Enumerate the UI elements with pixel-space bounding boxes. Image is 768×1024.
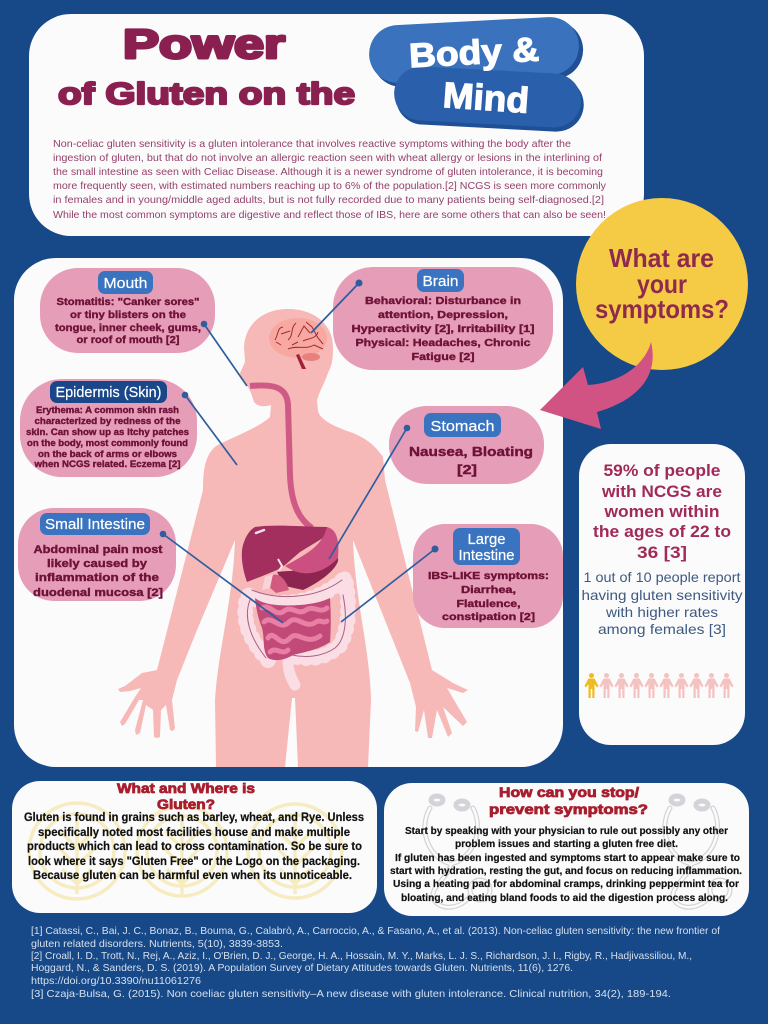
callout line: skin	[182, 392, 237, 465]
text: stomach symptoms	[409, 444, 533, 477]
text: skin symptoms	[26, 405, 189, 469]
text: skin symptoms: skin. Can show up as itchy patches	[26, 427, 189, 437]
bubble: small intestine	[18, 508, 176, 601]
callout line: brain	[311, 280, 362, 333]
intro paragraph	[53, 138, 607, 221]
illustration: liver	[242, 526, 328, 582]
text: gluten description: products which can lead to cross contamination. So be sure to	[27, 841, 362, 853]
text: prevention advice: If gluten has been ingested and symptoms start to appear make sure to	[395, 852, 740, 864]
heading: How can you stop/prevent symptoms?	[489, 784, 648, 817]
stat: 59% of people	[593, 461, 731, 562]
title badge: Body & Mind: Body &	[408, 31, 540, 75]
text: brain symptoms: Fatigue [2]	[412, 351, 474, 363]
panel: header	[29, 14, 644, 236]
text: prevention advice	[390, 825, 742, 904]
label: Small Intestine	[40, 513, 150, 535]
text: skin symptoms: on the body, most commonly found	[27, 438, 188, 448]
illustration: esophagus	[250, 385, 312, 528]
icon: wheat watermarks	[29, 803, 342, 899]
bubble: mouth	[40, 268, 215, 353]
title badge: Body & Mind	[368, 15, 585, 133]
callout line: mouth	[201, 321, 247, 386]
arrow: from circle to symptoms	[540, 342, 653, 429]
stat: 1 out of 10: with higher rates	[605, 604, 718, 620]
heading: What and Where is Gluten?	[117, 780, 255, 812]
text: skin symptoms: Erythema: A common skin rash	[36, 405, 179, 415]
callout circle: What are your symptoms?: What are	[609, 243, 714, 273]
stat: 1 out of 10: having gluten sensitivity	[582, 587, 742, 603]
text: prevention advice: bloating, and eating bland foods to aid the digestion process along.	[401, 892, 728, 904]
text: gluten description: Because gluten can be harmful even when its unnoticeable.	[33, 870, 352, 882]
callout line: small intestine	[160, 531, 283, 623]
references: [1] Catassi, C., Bai, J. C., Bonaz, B., Bouma, G., Calabrò, A., Carroccio, A., & Fasano, A., et al. (2013). Non-celiac gluten sensitivity: the new frontier of	[31, 925, 720, 937]
text: gluten description: look where it says "Gluten Free" or the Logo on the packaging.	[28, 856, 360, 868]
heading: What and Where is Gluten?: What and Where is	[117, 780, 255, 796]
stat: 59% of people: 59% of people	[604, 461, 720, 480]
pictogram: 1 of 10 people	[584, 673, 734, 698]
references: gluten related disorders. Nutrients, 5(10), 3839-3853.	[31, 938, 283, 950]
title: Power of Gluten on the: of Gluten on the	[58, 76, 355, 111]
references: https://doi.org/10.3390/nu11061276	[31, 975, 201, 987]
stat: 1 out of 10: among females [3]	[598, 621, 726, 637]
text: small intestine symptoms: Abdominal pain most	[34, 544, 163, 556]
text: large intestine symptoms: Diarrhea,	[461, 585, 516, 596]
text: mouth symptoms	[55, 296, 201, 346]
intro paragraph: the small intestine as seen with Celiac Disease. Although it is a newer syndrome of gluten intolerance, it is becoming	[53, 166, 603, 178]
text: mouth symptoms: Stomatitis: "Canker sores"	[56, 296, 200, 308]
label: Mouth	[98, 271, 153, 294]
text: small intestine symptoms: duodenal mucosa [2]	[33, 587, 163, 599]
text: prevention advice: Start by speaking with your physician to rule out possibly any other	[405, 825, 728, 837]
text: prevention advice: start with hydration, resting the gut, and focus on reducing inflammation.	[390, 865, 742, 877]
text: gluten description: specifically noted most facilities house and make multiple	[38, 827, 350, 839]
illustration: brain	[269, 318, 327, 369]
bubble: stomach	[389, 406, 544, 484]
illustration: small intestine	[255, 598, 331, 660]
callout circle: What are your symptoms?: symptoms?	[595, 294, 729, 324]
illustration: large intestine	[245, 578, 348, 685]
text: prevention advice: Using a heating pad for abdominal cramps, drinking peppermint tea for	[393, 878, 739, 890]
panel: how to stop symptoms	[384, 783, 749, 916]
callout circle: What are your symptoms?: your	[637, 269, 687, 299]
bubble: large intestine	[413, 524, 563, 628]
callout circle: What are your symptoms?	[576, 198, 748, 370]
intro paragraph: While the most common symptoms are digestive and reflect those of IBS, here are some others that can also be seen!	[53, 209, 606, 221]
label: Mouth: Mouth	[104, 275, 148, 292]
text: small intestine symptoms: inflammation of the	[35, 572, 159, 584]
references: Hoggard, N., & Sanders, D. S. (2019). A Population Survey of Dietary Attitudes towards Gluten. Nutrients, 11(6), 1276.	[31, 962, 573, 974]
text: gluten description	[24, 812, 364, 882]
stat: 59% of people: the ages of 22 to	[593, 522, 731, 541]
text: gluten description: Gluten is found in grains such as barley, wheat, and Rye. Unless	[24, 812, 364, 824]
text: large intestine symptoms: Flatulence,	[456, 599, 521, 610]
label: Stomach: Stomach	[430, 418, 494, 435]
text: mouth symptoms: or tiny blisters on the	[70, 309, 186, 321]
label: Large Intestine	[453, 528, 520, 565]
stat: 59% of people: 36 [3]	[637, 543, 687, 562]
title badge: Body & Mind: Mind	[442, 74, 530, 121]
icon: stethoscope watermarks	[425, 796, 730, 907]
intro paragraph: ingestion of gluten, but that do not involve an allergic reaction seen with wheat allergy or lesions in the interlining of	[53, 152, 602, 164]
text: brain symptoms: attention, Depression,	[378, 309, 508, 321]
title: Power of Gluten on the	[58, 21, 355, 111]
title: Power of Gluten on the: Power	[123, 21, 285, 67]
text: large intestine symptoms	[428, 571, 549, 623]
references: [3] Czaja-Bulsa, G. (2015). Non coeliac gluten sensitivity–A new disease with gluten intolerance. Clinical nutrition, 34(2), 189-194.	[31, 988, 671, 1000]
text: mouth symptoms: tongue, inner cheek, gums,	[55, 322, 201, 334]
label: Large Intestine: Large	[468, 531, 506, 548]
intro paragraph: Non-celiac gluten sensitivity is a gluten intolerance that involves reactive symptoms withing the body after the	[53, 138, 571, 150]
label: Large Intestine: Intestine	[458, 547, 514, 564]
heading: How can you stop/prevent symptoms?: prevent symptoms?	[489, 801, 648, 817]
label: Epidermis (Skin): Epidermis (Skin)	[56, 384, 162, 401]
text: skin symptoms: characterized by redness of the	[34, 416, 180, 426]
panel: statistics	[579, 444, 745, 745]
text: skin symptoms: on the back of arms or elbows	[38, 449, 177, 459]
text: skin symptoms: when NCGS related. Eczema [2]	[33, 459, 180, 469]
text: prevention advice: problem issues and starting a gluten free diet.	[455, 838, 678, 850]
text: mouth symptoms: or roof of mouth [2]	[76, 334, 180, 346]
heading: What and Where is Gluten?: Gluten?	[157, 796, 215, 812]
intro paragraph: more frequently seen, with estimated numbers reaching up to 6% of the population.[2] NCGS is seen more commonly	[53, 180, 607, 192]
text: brain symptoms: Hyperactivity [2], Irritability [1]	[352, 323, 534, 335]
intro paragraph: in females and in young/middle aged adults, but is not fully recorded due to many patients being self-diagnosed.[2]	[53, 194, 604, 206]
callout line: large intestine	[341, 546, 438, 622]
stat: 1 out of 10: 1 out of 10 people report	[584, 569, 741, 585]
bubble: brain	[333, 267, 553, 370]
callout line: stomach	[329, 425, 410, 559]
text: large intestine symptoms: IBS-LIKE symptoms:	[428, 571, 549, 582]
panel: what and where is gluten	[12, 780, 377, 913]
stat: 59% of people: women within	[603, 502, 720, 521]
text: stomach symptoms: [2]	[457, 462, 477, 477]
illustration: stomach	[262, 527, 338, 593]
text: small intestine symptoms: likely caused by	[47, 558, 148, 570]
bubble: epidermis	[20, 379, 197, 477]
stat: 1 out of 10	[582, 569, 742, 637]
text: small intestine symptoms	[33, 544, 163, 599]
stat: 59% of people: with NCGS are	[601, 482, 722, 501]
text: stomach symptoms: Nausea, Bloating	[409, 444, 533, 459]
text: large intestine symptoms: constipation [2]	[442, 612, 535, 623]
text: brain symptoms: Physical: Headaches, Chronic	[356, 337, 531, 349]
text: brain symptoms	[352, 295, 534, 363]
label: Small Intestine: Small Intestine	[45, 516, 145, 533]
label: Brain	[417, 269, 464, 292]
panel: body diagram	[14, 258, 563, 767]
text: brain symptoms: Behavioral: Disturbance in	[365, 295, 521, 307]
illustration: human body silhouette	[118, 309, 468, 767]
references	[31, 925, 720, 1000]
label: Stomach	[424, 413, 501, 437]
label: Brain: Brain	[422, 273, 458, 290]
references: [2] Croall, I. D., Trott, N., Rej, A., Aziz, I., O'Brien, D. J., George, H. A., Hossain, M. Y., Marks, L. J. S., Richardson, J. I., Rigby, R., Hadjivassiliou, M.,	[31, 950, 692, 962]
heading: How can you stop/prevent symptoms?: How can you stop/	[499, 784, 639, 800]
